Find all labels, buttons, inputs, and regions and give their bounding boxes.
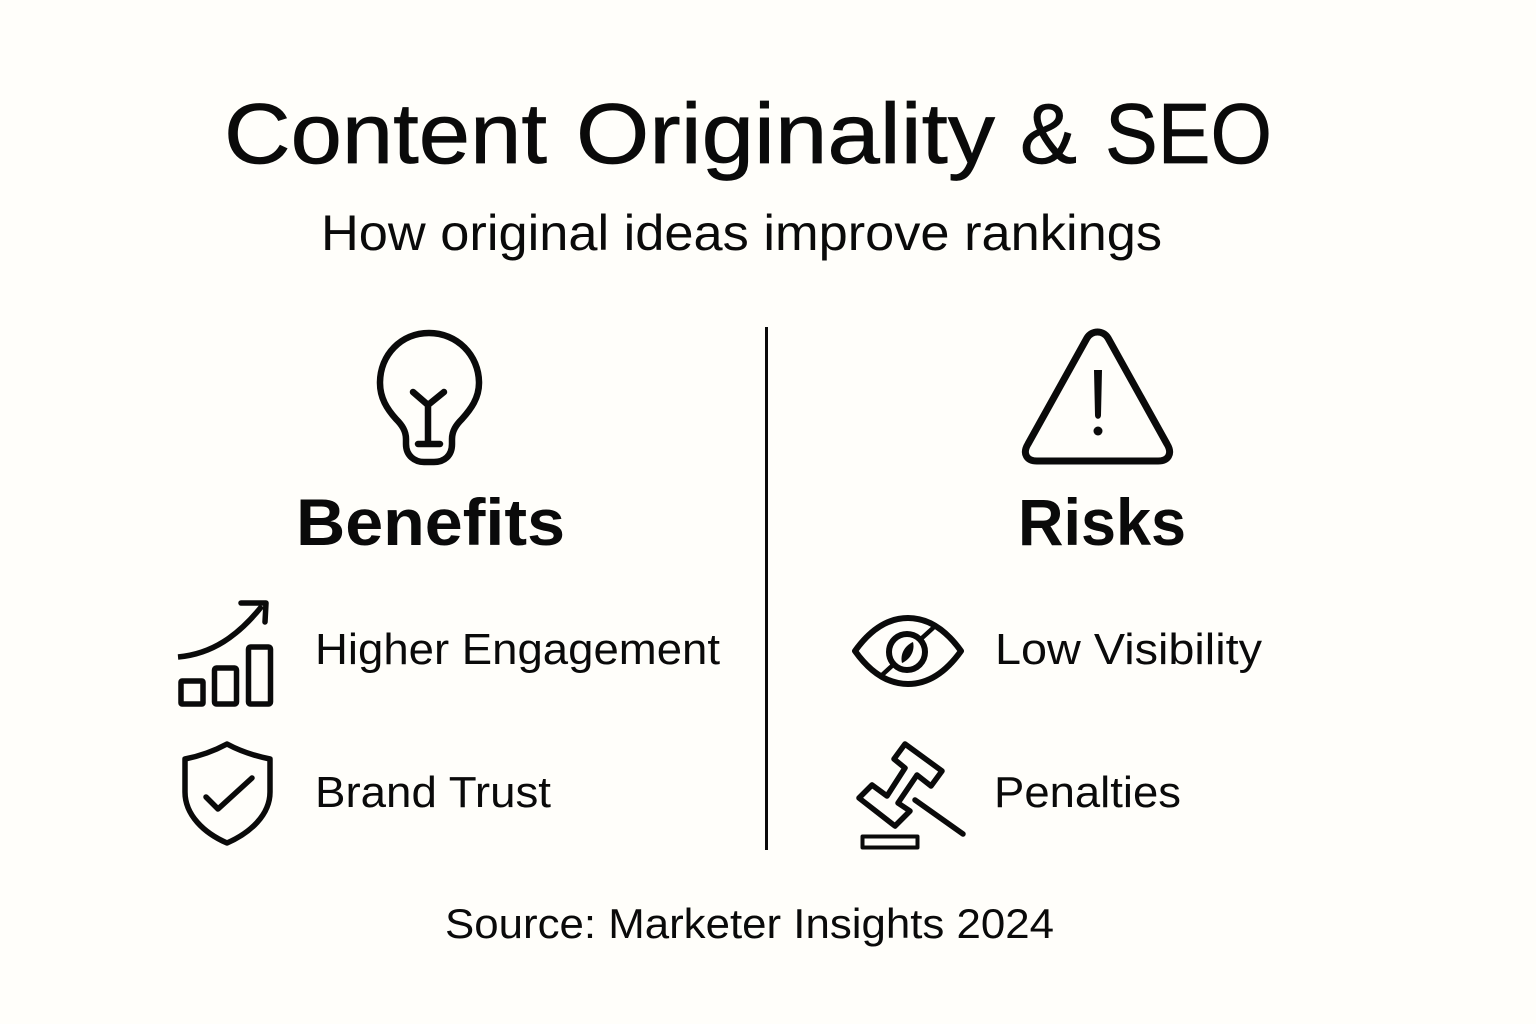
- panel: benefits: [178, 333, 720, 843]
- label: penalties: Penalties: [994, 768, 1181, 817]
- title: Content: [224, 87, 547, 182]
- panel: risks: [855, 332, 1262, 848]
- title: SEO: [1105, 87, 1272, 182]
- icon: warning triangle: [1025, 332, 1170, 461]
- icon: shield check: [185, 744, 270, 843]
- label: low visibility: Low Visibility: [995, 625, 1262, 674]
- icon: growth chart: [178, 603, 270, 704]
- label: higher engagement: Higher Engagement: [315, 625, 720, 674]
- heading: benefits: Benefits: [296, 485, 565, 559]
- source note: Source: Marketer Insights 2024: [445, 900, 1054, 947]
- title: &: [1020, 87, 1077, 182]
- subtitle: How original ideas improve rankings: [321, 205, 1162, 261]
- icon: gavel: [859, 744, 963, 848]
- icon: light bulb: [380, 333, 479, 462]
- label: brand trust: Brand Trust: [315, 768, 551, 817]
- heading: risks: Risks: [1018, 485, 1186, 559]
- icon: crossed-out eye: [855, 618, 961, 684]
- center divider: [765, 327, 768, 850]
- title: Originality: [576, 87, 996, 182]
